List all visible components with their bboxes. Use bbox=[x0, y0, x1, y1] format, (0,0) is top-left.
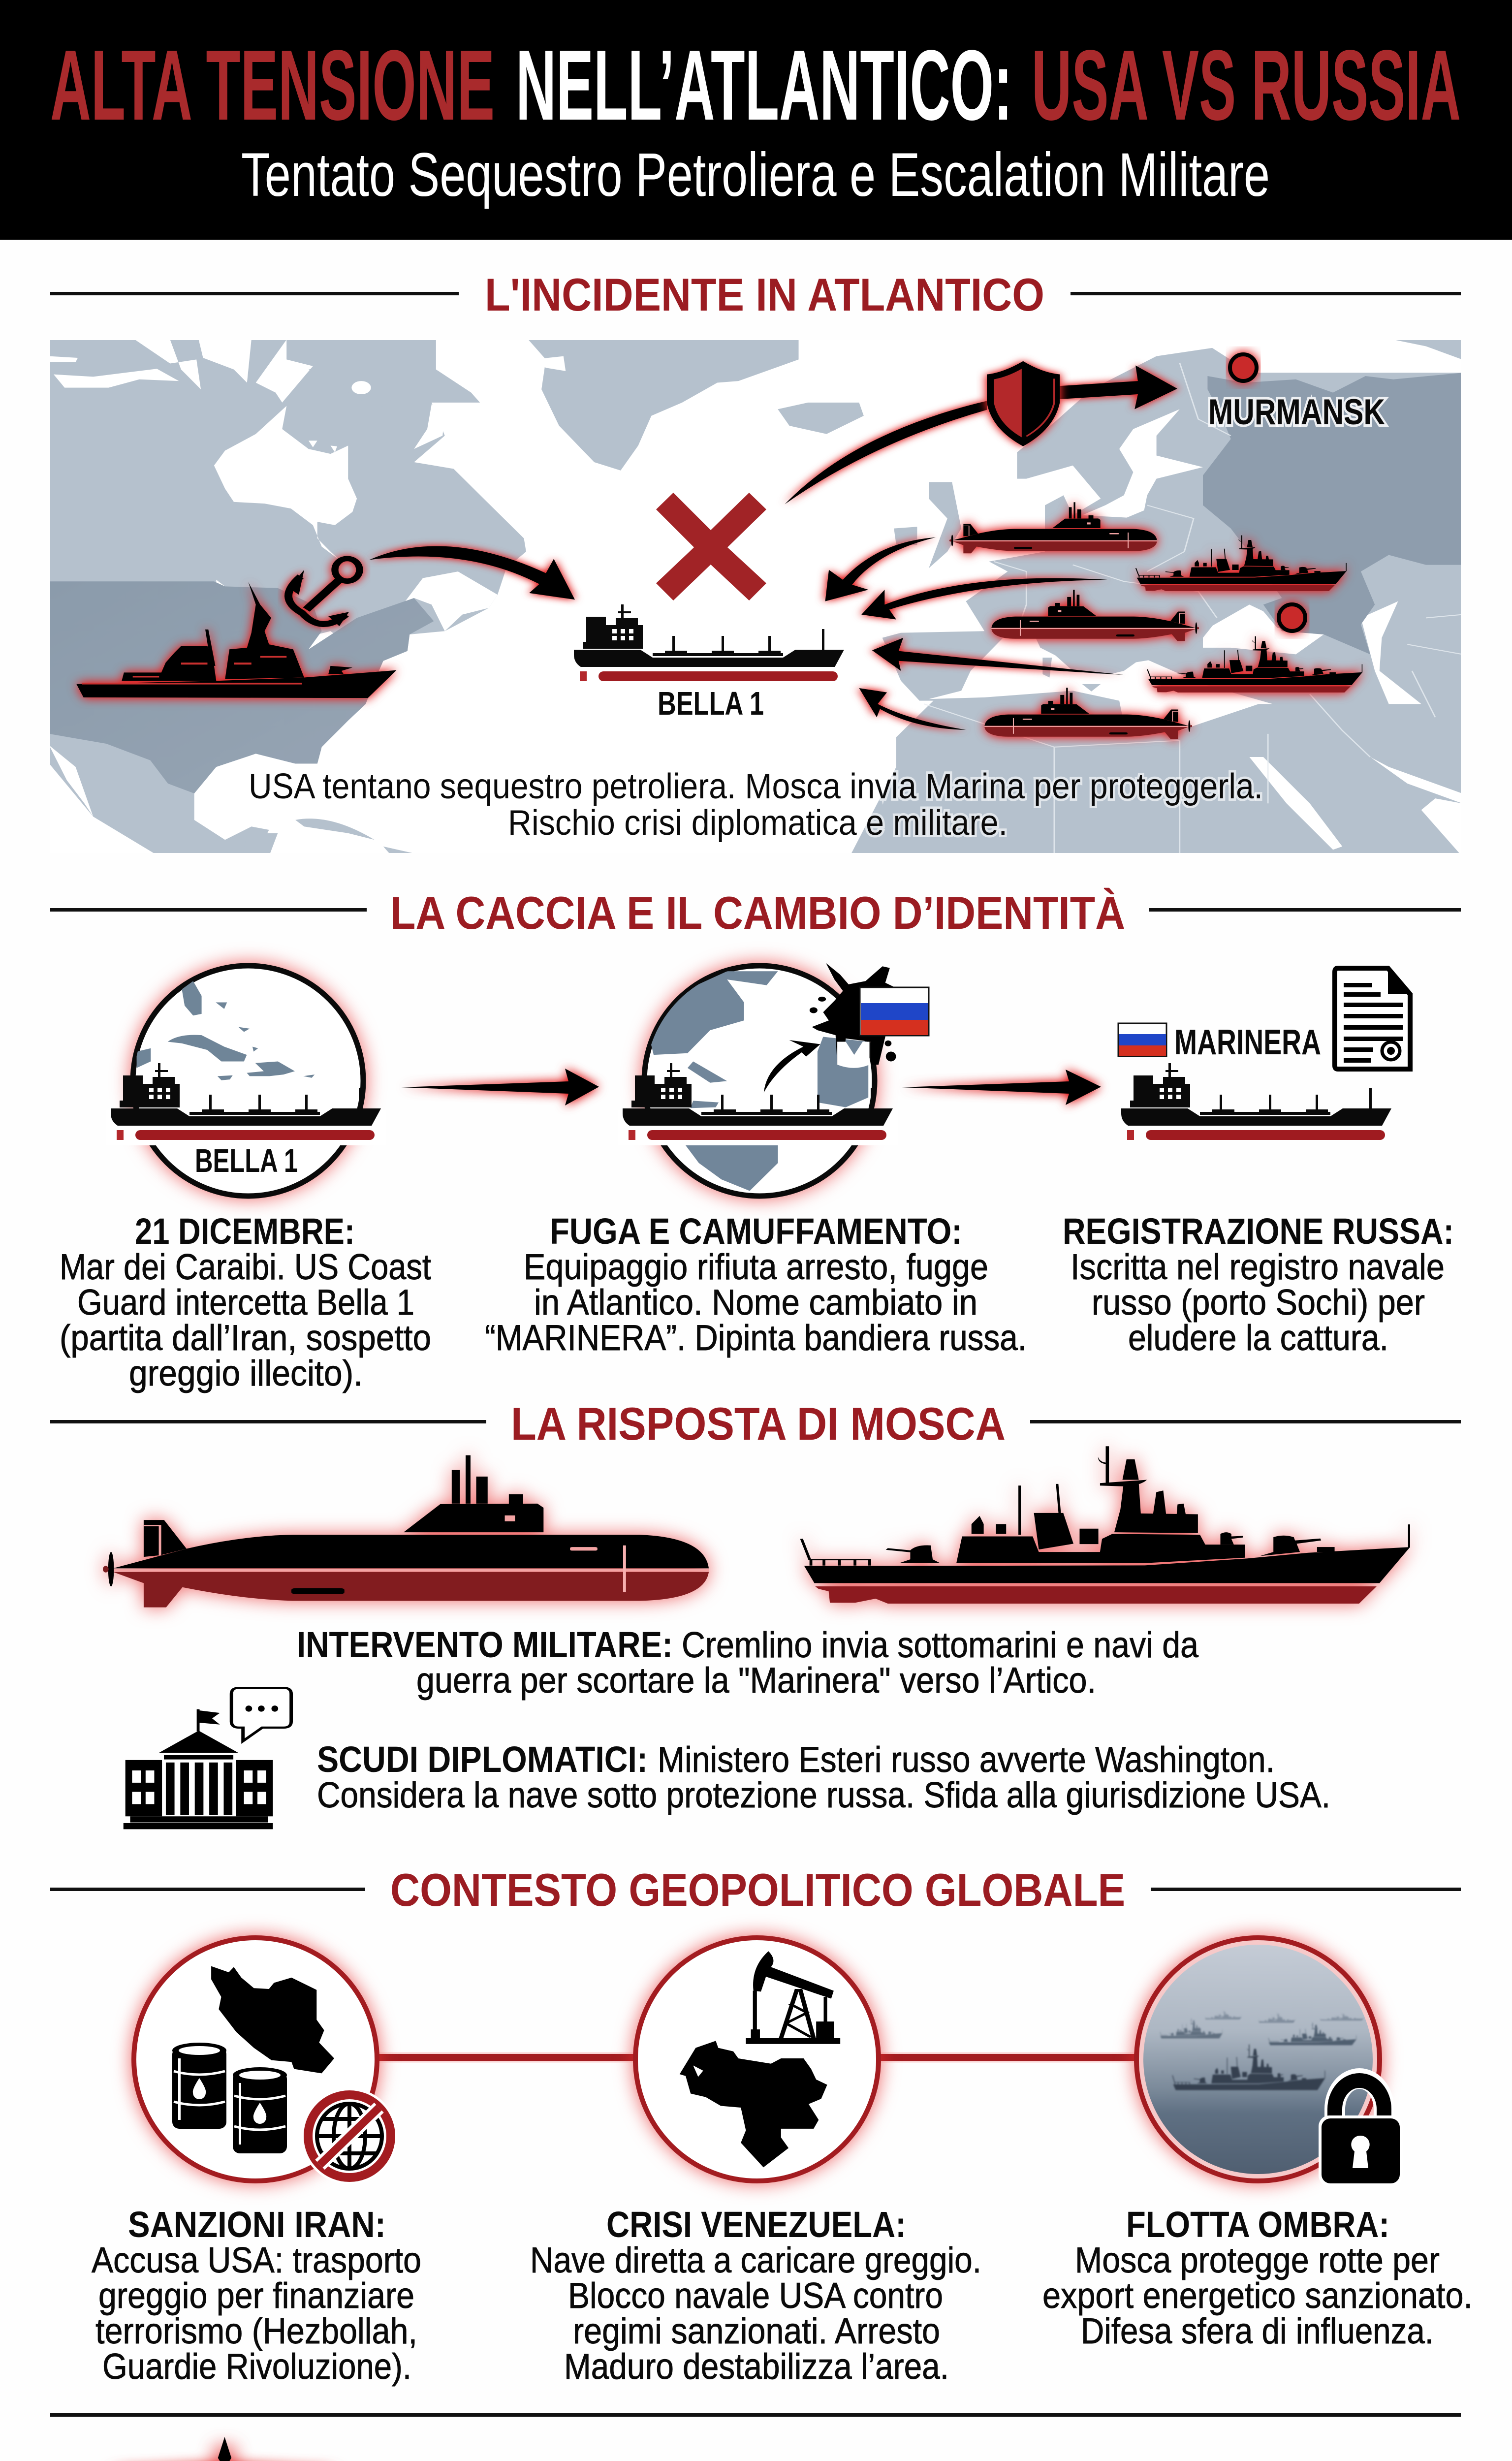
text: shadow fleet: export energetico sanzionato. bbox=[1042, 2276, 1473, 2316]
map caption: USA tentano sequestro petroliera. Mosca invia Marina per proteggerla. bbox=[249, 767, 1263, 806]
icon: ministry building with speech bubble bbox=[124, 1688, 291, 1829]
marker: Black Sea port bbox=[1279, 604, 1305, 631]
Iran map bbox=[211, 1966, 334, 2073]
step 3 text: Iscritta nel registro navale bbox=[1071, 1247, 1445, 1287]
circle: shadow fleet bbox=[1132, 1938, 1403, 2186]
text: shadow fleet: Mosca protegge rotte per bbox=[1075, 2240, 1440, 2280]
step 2 text: “MARINERA”. Dipinta bandiera russa. bbox=[485, 1318, 1027, 1358]
tanker: Bella 1 bbox=[574, 604, 844, 681]
icon: red X bbox=[656, 493, 766, 600]
step 3 text: REGISTRAZIONE RUSSA: bbox=[1063, 1211, 1454, 1252]
section heading: Moscow's response bbox=[50, 1398, 1461, 1450]
section heading: the chase: LA CACCIA E IL CAMBIO D’IDENTITÀ bbox=[390, 887, 1125, 939]
large warship bbox=[800, 1446, 1410, 1604]
Russian submarine 3 bbox=[984, 688, 1192, 739]
tanker bbox=[623, 1063, 893, 1140]
step 3 illustration: renamed tanker bbox=[1118, 968, 1410, 1140]
Russian flag bbox=[860, 987, 929, 1036]
Russian warship 1 bbox=[1135, 536, 1347, 591]
panel: Atlantic map bbox=[49, 340, 1462, 856]
text: Iran sanctions bbox=[92, 2204, 421, 2387]
step 2 text: Equipaggio rifiuta arresto, fugge bbox=[524, 1247, 988, 1287]
step 3 text bbox=[1063, 1211, 1454, 1358]
map caption bbox=[249, 767, 1263, 843]
arrow: step 1 to 2 bbox=[401, 1069, 599, 1105]
map caption: Rischio crisi diplomatica e militare. bbox=[508, 803, 1008, 843]
tanker bbox=[1121, 1063, 1391, 1140]
step 2 text: in Atlantico. Nome cambiato in bbox=[534, 1283, 977, 1323]
step 1 text bbox=[60, 1211, 431, 1393]
section heading: incident: L'INCIDENTE IN ATLANTICO bbox=[485, 269, 1044, 320]
text: Venezuela crisis: regimi sanzionati. Arresto bbox=[573, 2311, 940, 2351]
world map background bbox=[49, 340, 1462, 856]
icon: padlock bbox=[1319, 2079, 1403, 2186]
section heading: Moscow's response: LA RISPOSTA DI MOSCA bbox=[511, 1398, 1006, 1450]
title bbox=[50, 30, 1461, 141]
text: Venezuela crisis bbox=[530, 2204, 981, 2387]
Russian flag bbox=[1118, 1023, 1166, 1056]
label: Murmansk: MURMANSK bbox=[1208, 392, 1385, 432]
label: Bella 1: BELLA 1 bbox=[195, 1142, 298, 1179]
text: military intervention: Cremlino invia sottomarini e navi da bbox=[682, 1625, 1198, 1665]
USA warship bbox=[76, 582, 396, 698]
marker: Murmansk bbox=[1230, 354, 1257, 381]
text: military intervention: INTERVENTO MILITARE: bbox=[297, 1624, 673, 1665]
text: shadow fleet bbox=[1042, 2204, 1473, 2351]
photo: fleet in the fog bbox=[1132, 1939, 1388, 2180]
step 2 text: FUGA E CAMUFFAMENTO: bbox=[550, 1211, 962, 1252]
section heading: geopolitical context: CONTESTO GEOPOLITICO GLOBALE bbox=[390, 1864, 1125, 1916]
text: Iran sanctions: SANZIONI IRAN: bbox=[128, 2204, 386, 2245]
text: Venezuela crisis: CRISI VENEZUELA: bbox=[606, 2204, 906, 2245]
label: Bella 1: BELLA 1 bbox=[658, 685, 764, 722]
Venezuela map bbox=[680, 2041, 827, 2167]
section heading: incident bbox=[50, 269, 1461, 320]
text: military intervention bbox=[297, 1624, 1198, 1701]
arrows: Russian escort bbox=[785, 365, 1177, 730]
circle: Venezuela crisis bbox=[635, 1938, 879, 2181]
text: Iran sanctions: Guardie Rivoluzione). bbox=[102, 2347, 411, 2387]
text: Iran sanctions: greggio per finanziare bbox=[98, 2276, 414, 2316]
text: diplomatic shields: SCUDI DIPLOMATICI: bbox=[317, 1739, 648, 1780]
text: diplomatic shields: Considera la nave sotto protezione russa. Sfida alla giurisdizione USA. bbox=[317, 1775, 1330, 1815]
tanker bbox=[111, 1063, 381, 1140]
arrow: step 2 to 3 bbox=[902, 1070, 1101, 1105]
text: military intervention: guerra per scortare la "Marinera" verso l’Artico. bbox=[416, 1661, 1096, 1701]
label: Marinera: MARINERA bbox=[1174, 1023, 1321, 1062]
icon: hook bbox=[288, 559, 359, 626]
oil barrel 1 bbox=[172, 2043, 226, 2129]
Caribbean map bbox=[137, 981, 315, 1080]
text: Iran sanctions: terrorismo (Hezbollah, bbox=[95, 2311, 417, 2351]
text: Venezuela crisis: Maduro destabilizza l’area. bbox=[564, 2347, 949, 2387]
text: shadow fleet: FLOTTA OMBRA: bbox=[1126, 2204, 1389, 2245]
Russian submarine 1 bbox=[949, 502, 1157, 553]
step 1 text: Mar dei Caraibi. US Coast bbox=[60, 1247, 431, 1287]
Russian submarine 2 bbox=[991, 590, 1199, 641]
step 3 text: eludere la cattura. bbox=[1128, 1318, 1388, 1358]
text: diplomatic shields bbox=[317, 1739, 1330, 1815]
step 2 text bbox=[485, 1211, 1027, 1358]
text: shadow fleet: Difesa sfera di influenza. bbox=[1081, 2311, 1434, 2351]
icon: registry document bbox=[1335, 968, 1410, 1069]
text: Venezuela crisis: Nave diretta a caricare greggio. bbox=[530, 2240, 981, 2280]
connector lines bbox=[379, 2054, 1135, 2061]
globe map bbox=[648, 971, 868, 1191]
step 1 text: 21 DICEMBRE: bbox=[135, 1211, 355, 1252]
header band bbox=[0, 0, 1512, 240]
title: NELL’ATLANTICO: bbox=[516, 30, 1012, 141]
step 2 illustration: globe and repaint bbox=[618, 963, 929, 1196]
step 1 text: Guard intercetta Bella 1 bbox=[77, 1283, 414, 1323]
text: diplomatic shields: Ministero Esteri russo avverte Washington. bbox=[658, 1740, 1275, 1780]
circle: Iran sanctions bbox=[134, 1938, 398, 2184]
arrow: seizure attempt bbox=[369, 546, 575, 599]
step 1 illustration: Bella 1 in the Caribbean bbox=[106, 966, 386, 1196]
step 1 text: (partita dall’Iran, sospetto bbox=[60, 1318, 431, 1358]
step 1 text: greggio illecito). bbox=[129, 1354, 363, 1393]
Russian warship 2 bbox=[1147, 636, 1362, 693]
icon: scales with globe and treaty bbox=[76, 2437, 372, 2461]
icon: shield bbox=[987, 361, 1060, 446]
section heading: geopolitical context bbox=[50, 1864, 1461, 1916]
step 3 text: russo (porto Sochi) per bbox=[1092, 1283, 1425, 1323]
title: ALTA TENSIONE bbox=[50, 30, 495, 141]
divider: stakes bbox=[50, 2413, 1461, 2417]
paint splat bbox=[764, 963, 896, 1093]
text: Venezuela crisis: Blocco navale USA contro bbox=[568, 2276, 943, 2316]
text: Iran sanctions: Accusa USA: trasporto bbox=[92, 2240, 421, 2280]
section heading: the chase bbox=[50, 887, 1461, 939]
icon: oil pump bbox=[746, 1951, 840, 2044]
large submarine bbox=[103, 1455, 709, 1608]
icon: banned globe bbox=[301, 2088, 398, 2184]
oil barrel 2 bbox=[233, 2067, 287, 2153]
